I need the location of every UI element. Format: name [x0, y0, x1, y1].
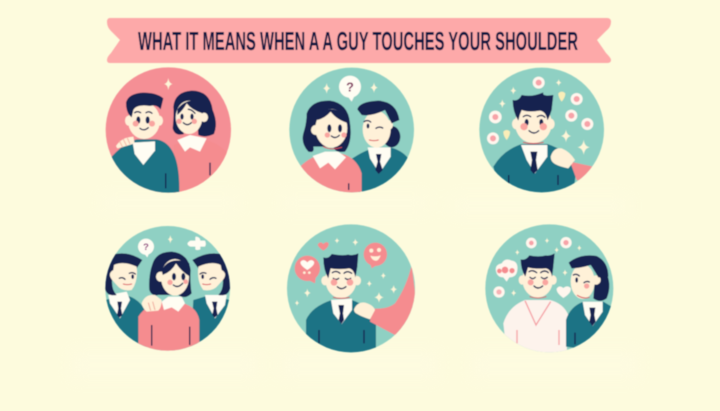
icon: small heart	[318, 242, 329, 251]
panel: man in white and winking partner	[485, 224, 613, 353]
panel: friendly couple, man and woman	[106, 67, 233, 193]
icon: sparkles	[511, 238, 582, 296]
icon: sparkles	[499, 79, 590, 155]
icon: heart speech bubble	[295, 256, 320, 283]
icon: question bubble: ?	[143, 242, 149, 252]
icon: sparkles	[323, 82, 378, 94]
icon: plus	[187, 237, 206, 250]
icon: sparkles	[295, 238, 397, 306]
icon: sparkle	[168, 235, 173, 244]
icon: sparkle	[164, 78, 173, 90]
icon: smiley speech bubble	[364, 243, 387, 268]
panel: man with hand on shoulder and flowers	[479, 68, 604, 193]
panel: man happy with hand on shoulder	[287, 224, 420, 353]
icon: flowers	[493, 237, 572, 298]
icon: flower thought cloud	[496, 259, 517, 282]
panel: woman between two men	[105, 226, 230, 353]
icon: question bubble: ?	[346, 80, 354, 94]
panel: woman and winking man with question	[289, 68, 414, 193]
title banner	[107, 18, 611, 63]
icon: heart	[557, 286, 571, 298]
icon: flowers	[487, 77, 593, 144]
